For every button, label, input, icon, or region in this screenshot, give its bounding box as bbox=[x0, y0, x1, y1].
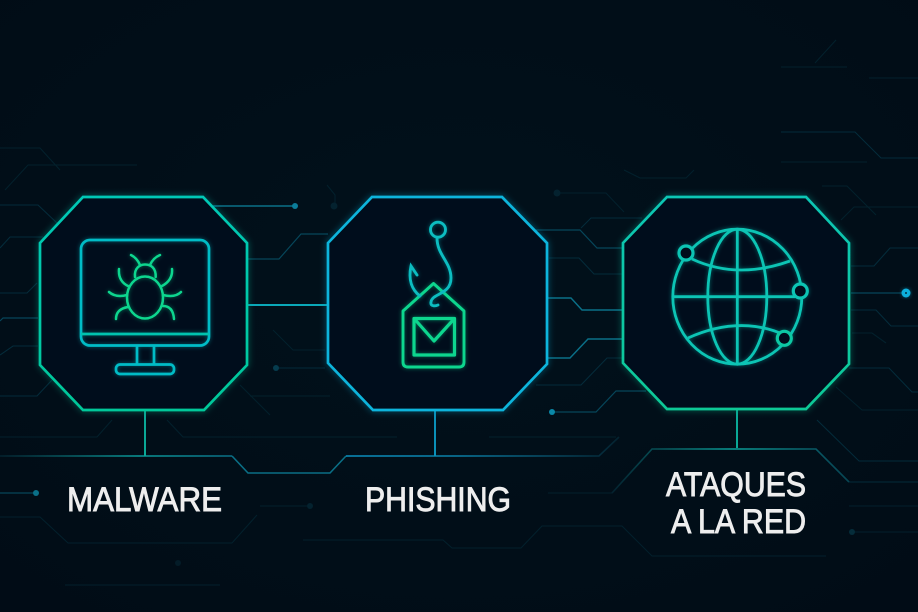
octagon frame bbox=[328, 197, 547, 410]
icon: globe bbox=[673, 229, 807, 364]
label: network attacks: ATAQUES bbox=[666, 466, 806, 504]
connector: malware to phishing bbox=[247, 304, 328, 306]
connector: malware stem bbox=[144, 410, 146, 456]
panel: malware bbox=[40, 197, 247, 410]
connector: phishing stem bbox=[434, 410, 436, 456]
label: network attacks: A LA RED bbox=[671, 503, 806, 541]
icon: fishing hook bbox=[410, 222, 451, 306]
icon: monitor bbox=[81, 240, 209, 374]
label: network attacks bbox=[666, 466, 806, 541]
panel: network attacks bbox=[623, 197, 849, 409]
panel: phishing bbox=[328, 197, 547, 410]
octagon frame bbox=[623, 197, 849, 409]
label: phishing: PHISHING bbox=[365, 481, 511, 519]
circuit nodes bbox=[33, 190, 855, 566]
bottom connector traces bbox=[0, 437, 849, 493]
connector: network attacks stem bbox=[736, 409, 738, 448]
icon: bug bbox=[109, 255, 181, 319]
bright node right bbox=[902, 288, 910, 298]
label: malware: MALWARE bbox=[67, 481, 222, 519]
icon: tag with envelope bbox=[403, 284, 464, 367]
octagon frame bbox=[40, 197, 247, 410]
